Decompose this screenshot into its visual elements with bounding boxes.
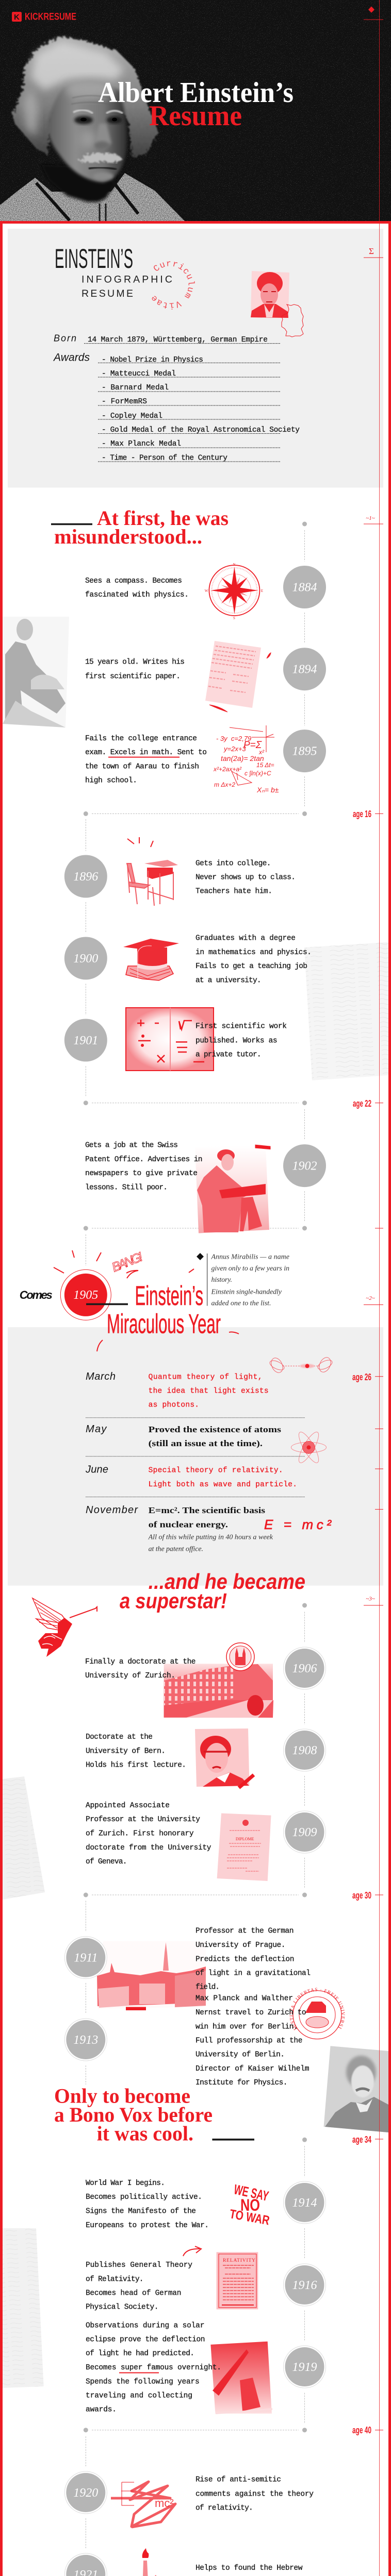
icon: math scribbles: Xₙ= b± <box>256 786 279 794</box>
note: annus mirabilis: history. <box>211 1276 232 1284</box>
row: June <box>85 1464 297 1489</box>
text: first work: a private tutor. <box>196 1051 262 1059</box>
text: doctorate Zurich: University of Zurich. <box>85 1672 175 1680</box>
year badge 1906: 1906 <box>292 1662 317 1675</box>
text: compass: fascinated with physics. <box>85 591 189 599</box>
icon: atoms in line <box>268 1355 334 1375</box>
heading: Only to become a Bono Vox: Only to become <box>54 2084 190 2108</box>
text: college: Teachers hate him. <box>196 888 272 896</box>
awards list: - Time - Person of the Century <box>102 454 227 463</box>
awards list: Awards <box>53 352 90 364</box>
text: solar eclipse: awards. <box>86 2406 117 2414</box>
year badge 1896: 1896 <box>73 870 98 884</box>
row: March: Quantum theory of light, <box>149 1374 263 1382</box>
text: Bern: University of Bern. <box>86 1748 166 1756</box>
heading: At first, he was misunderstood <box>51 506 229 548</box>
timeline entry: 1906 <box>85 1643 326 1718</box>
hero photo: Einstein portrait <box>0 36 185 221</box>
text: anti-semitic comments: Rise of anti-semitic <box>196 2476 281 2484</box>
icon: crossed-out formula <box>111 2482 175 2527</box>
row: May: May <box>86 1423 107 1435</box>
handwritten: E=mc2: E = mc² <box>264 1517 332 1532</box>
timeline entry: 1908 <box>86 1728 326 1788</box>
timeline entry: 1902 <box>85 1142 326 1233</box>
icon: open book with math symbols <box>126 1008 214 1071</box>
photo: Prague square <box>97 1941 206 2010</box>
text: professor Prague and Berlin: Full professorship at the <box>196 2037 302 2045</box>
note: annus mirabilis: given only to a few years in <box>211 1265 289 1273</box>
born row: Born <box>54 333 76 343</box>
heading: and he became a superstar <box>120 1569 305 1613</box>
row: May: (still an issue at the time). <box>149 1438 263 1448</box>
timeline entry: 1914 <box>86 2179 326 2230</box>
heading: Einstein's infographic resume: INFOGRAPHIC <box>82 274 172 285</box>
illustration: angel with trumpet <box>32 1598 97 1657</box>
icon: compass: W <box>205 589 208 593</box>
timeline entry: 1901 <box>64 1008 287 1071</box>
born row: 14 March 1879, Württemberg, German Empire <box>88 336 268 344</box>
year badge 1919: 1919 <box>292 2361 317 2374</box>
year badge 1911 <box>64 1937 107 1979</box>
year badge 1921 <box>64 2553 107 2576</box>
icon: math scribbles: x² <box>258 749 265 756</box>
awards list: - Barnard Medal <box>102 384 169 392</box>
text: graduation: Graduates with a degree <box>196 935 296 943</box>
year badge 1914 <box>284 2181 326 2224</box>
timeline entry: 1916 <box>86 2246 326 2312</box>
year badge 1901: 1901 <box>73 1034 98 1047</box>
timeline entry: 1896 <box>64 837 296 906</box>
text: general relativity <box>86 2261 192 2312</box>
text: professor Prague and Berlin: Professor at the German <box>196 1927 294 1936</box>
heading: Einstein's Miraculous Year <box>107 1281 221 1340</box>
text: anti-semitic comments <box>196 2476 314 2512</box>
text: associate professor: Appointed Associate <box>86 1802 170 1810</box>
icon: university seal <box>226 1643 254 1671</box>
icon: compass <box>205 563 263 620</box>
text: professor Prague and Berlin: of light in a gravitational <box>196 1970 311 1978</box>
ruler label: age 40: age 40 <box>352 2425 371 2435</box>
icon: compass: S <box>233 616 235 620</box>
text: Bern <box>86 1733 186 1769</box>
icon: compass: E <box>261 589 263 593</box>
age ruler <box>352 0 383 2576</box>
text: graduation: Fails to get a teaching job <box>196 962 307 971</box>
icon: we say no to war: NO <box>240 2196 260 2214</box>
note: annus mirabilis: Einstein single-handedly <box>210 1288 282 1296</box>
text: doctorate Zurich <box>85 1658 196 1680</box>
timeline entry: 1884 <box>85 563 326 620</box>
text: compass <box>85 577 189 599</box>
heading: Einstein's Miraculous Year: Miraculous Year <box>107 1309 221 1340</box>
photo: teenage Einstein, faded <box>3 617 69 727</box>
icon: Hebrew University logo <box>135 2548 167 2576</box>
panel: hero banner <box>0 0 391 221</box>
heading: Only to become a Bono Vox: a Bono Vox before <box>54 2103 213 2126</box>
text: WWI: Europeans to protest the War. <box>86 2222 209 2230</box>
text: associate professor: Professor at the University <box>86 1816 200 1824</box>
ruler marker: section 1: ~1~ <box>366 515 375 521</box>
text: college exam <box>85 735 207 785</box>
timeline connectors <box>84 521 307 2576</box>
year badge 1909: 1909 <box>292 1826 317 1839</box>
icon: math scribbles: P=Σ <box>243 740 262 751</box>
ruler marker: top diamond <box>368 6 374 13</box>
text: general relativity: Publishes General Theory <box>86 2261 192 2269</box>
title: Albert Einstein’s <box>98 77 294 109</box>
icon: Relativity book: RELATIVITY <box>223 2258 255 2263</box>
text: solar eclipse: of light he had predicted. <box>86 2350 194 2358</box>
year badge 1914: 1914 <box>292 2196 317 2210</box>
year badge 1920 <box>64 2471 107 2514</box>
row: June: Special theory of relativity. <box>149 1466 283 1475</box>
text: WWI: World War I begins. <box>86 2179 165 2188</box>
text: college <box>196 859 296 896</box>
timeline entry: 1920 <box>64 2471 314 2527</box>
timeline entry: 1894 <box>85 641 326 712</box>
heading: and he became a superstar: a superstar! <box>120 1589 227 1613</box>
note: annus mirabilis: added one to the list. <box>211 1300 271 1308</box>
ruler label: age 30: age 30 <box>352 1890 371 1901</box>
icon: math scribbles: y=2x+3 <box>223 745 246 753</box>
text: patent office: Gets a job at the Swiss <box>85 1142 178 1150</box>
icon: math scribbles: - 3y c=2,79 <box>216 735 251 742</box>
title <box>98 77 294 132</box>
text: general relativity: Physical Society. <box>86 2303 159 2312</box>
stamp: Freie Universitat Berlin: IUSTITIA LIBERTAS · FREIE UNIVERSITÄT BERLIN <box>290 1988 345 2031</box>
awards list: - Max Planck Medal <box>102 440 181 448</box>
row: May: Proved the existence of atoms <box>149 1425 281 1434</box>
text: WWI: Signs the Manifesto of the <box>86 2207 196 2215</box>
text: graduation <box>196 935 312 985</box>
row: June: Light both as wave and particle. <box>149 1481 297 1489</box>
icon: compass: N <box>233 563 236 567</box>
icon: crossed-out formula: mc² <box>155 2497 174 2510</box>
year badge 1906 <box>284 1647 326 1689</box>
heading: At first, he was misunderstood: At first, he was <box>97 506 229 530</box>
year badge 1902: 1902 <box>292 1160 317 1173</box>
text: patent office: Patent Office. Advertises in <box>85 1156 202 1164</box>
note: annus mirabilis <box>197 1253 289 1308</box>
text: professor Prague and Berlin: Director of Kaiser Wilhelm <box>196 2065 309 2073</box>
year badge 1895: 1895 <box>292 745 317 758</box>
icon: math scribbles: c ∫ln(x)+C <box>245 770 271 777</box>
text: graduation: in mathematics and physics. <box>196 948 312 957</box>
text: patent office: newspapers to give private <box>85 1170 198 1178</box>
text: solar eclipse: Spends the following years <box>86 2378 200 2386</box>
year badge 1909 <box>284 1811 326 1853</box>
text: solar eclipse: traveling and collecting <box>86 2392 192 2400</box>
heading: Einstein's infographic resume: EINSTEIN’S <box>55 244 133 274</box>
text: Hebrew University: Helps to found the Hebrew <box>196 2564 303 2572</box>
text: professor Prague and Berlin: Predicts the deflection <box>196 1955 294 1963</box>
text: professor Prague and Berlin: Max Planck and Walther <box>196 1995 293 2003</box>
stamp: Freie Universitat Berlin <box>290 1988 345 2039</box>
text: professor Prague and Berlin: Institute for Physics. <box>196 2079 287 2087</box>
year badge 1884 <box>283 566 326 608</box>
heading: Only to become a Bono Vox: it was cool. <box>97 2122 193 2145</box>
text: patent office <box>85 1142 202 1192</box>
icon: math scribbles: tan(2a)= 2tan <box>221 754 264 762</box>
logo: Kickresume: K <box>14 13 20 22</box>
panel: miraculous year months <box>85 1355 334 1553</box>
photo: diploma: DIPLOME <box>236 1837 254 1841</box>
heading: Only to become a Bono Vox <box>54 2084 254 2145</box>
text: Bern: Doctorate at the <box>86 1733 153 1741</box>
text: first paper: first scientific paper. <box>85 673 181 681</box>
photo: university of Zurich building <box>164 1664 273 1718</box>
text: professor Prague and Berlin <box>196 1927 311 2087</box>
photo: observatory telescope <box>210 2342 272 2414</box>
text: solar eclipse: Becomes super famous overnight. <box>86 2364 221 2372</box>
year badge 1911: 1911 <box>74 1952 97 1965</box>
row: November: at the patent office. <box>149 1545 203 1553</box>
text: professor Prague and Berlin: Nernst travel to Zurich to <box>196 2009 306 2017</box>
year badge 1902 <box>283 1144 326 1187</box>
icon: we say no to war: WE SAY <box>233 2182 270 2204</box>
ruler label: age 16: age 16 <box>353 809 371 819</box>
year badge 1884: 1884 <box>292 581 317 595</box>
icon: school desk <box>127 837 178 906</box>
awards list: - Gold Medal of the Royal Astronomical Society <box>102 426 300 434</box>
text: associate professor: of Zurich. First honorary <box>86 1830 194 1838</box>
ruler marker: section 3: ~3~ <box>366 1596 375 1602</box>
icon: we say no to war: TO WAR <box>229 2207 271 2228</box>
ruler label: age 22: age 22 <box>353 1098 371 1109</box>
text: first paper <box>85 658 185 681</box>
panel: miraculous year background <box>8 1327 383 1586</box>
text: patent office: lessons. Still poor. <box>85 1184 168 1192</box>
year badge 1894 <box>283 648 326 690</box>
timeline entry: 1900 <box>64 935 312 985</box>
photo: young Einstein <box>251 271 289 318</box>
text: professor Prague and Berlin: University of Berlin. <box>196 2051 285 2059</box>
awards list: - ForMemRS <box>102 398 147 406</box>
timeline entry: 1919 <box>86 2322 326 2414</box>
row: May <box>86 1423 281 1448</box>
photo: diploma <box>217 1814 271 1881</box>
year badge 1919 <box>284 2346 326 2388</box>
text: college exam: high school. <box>85 777 137 785</box>
year badge 1900 <box>64 937 107 980</box>
dividers <box>86 1418 305 1497</box>
text: college exam: Fails the college entrance <box>85 735 197 743</box>
text: associate professor <box>86 1802 211 1866</box>
heading: Einstein's infographic resume: RESUME <box>82 288 133 299</box>
row: November <box>86 1504 273 1553</box>
year badge 1905: 1905 <box>73 1289 98 1302</box>
year badge 1900: 1900 <box>73 952 98 965</box>
text: college: Never shows up to class. <box>196 874 296 882</box>
year badge 1894: 1894 <box>292 663 317 676</box>
text: compass: Sees a compass. Becomes <box>85 577 182 585</box>
year badge 1908: 1908 <box>292 1744 317 1757</box>
heading: Einstein's Miraculous Year: Einstein’s <box>135 1281 203 1311</box>
comes label: Comes <box>20 1289 53 1301</box>
row: November: All of this while putting in 40 hours a week <box>148 1534 273 1541</box>
text: first paper: 15 years old. Writes his <box>85 658 185 667</box>
icon: math scribbles <box>213 725 279 794</box>
ruler label: age 26: age 26 <box>352 1372 371 1382</box>
row: March: the idea that light exists <box>149 1387 269 1396</box>
text: doctorate Zurich: Finally a doctorate at the <box>85 1658 196 1666</box>
photo: Einstein at the patent office <box>195 1145 270 1233</box>
awards list: - Matteucci Medal <box>102 370 176 378</box>
awards list <box>53 352 300 463</box>
year badge 1913 <box>64 2019 107 2061</box>
text: solar eclipse: eclipse prove the deflection <box>86 2336 205 2344</box>
text: first work: First scientific work <box>196 1023 287 1031</box>
born row <box>54 333 281 344</box>
panel: profile card background <box>8 229 383 487</box>
timeline entry: 1909 <box>86 1802 326 1881</box>
section: 1905 miraculous year heading <box>20 1249 289 1351</box>
faded manuscript page, right <box>304 942 388 1080</box>
row: November: of nuclear energy. <box>149 1519 228 1529</box>
icon: math scribbles: m Δx+2 <box>214 781 235 788</box>
panel: profile card <box>53 244 304 463</box>
photo: Einstein portrait, red <box>195 1728 254 1788</box>
text: WWI: Becomes politically active. <box>86 2193 202 2201</box>
text: anti-semitic comments: comments against the theory <box>196 2490 314 2498</box>
arrow <box>183 2246 201 2256</box>
heading: At first, he was misunderstood: misunderstood... <box>54 525 202 548</box>
year badge 1916 <box>284 2264 326 2306</box>
row: November: E=mc². The scientific basis <box>149 1505 265 1515</box>
text: college exam: the town of Aarau to finish <box>85 762 199 771</box>
text: associate professor: of Geneva. <box>86 1858 127 1866</box>
row: November: November <box>86 1504 138 1516</box>
title: Resume <box>149 100 242 132</box>
text: professor Prague and Berlin: field. <box>196 1984 220 1992</box>
year badge 1895 <box>283 730 326 772</box>
faded manuscript page, lower left <box>3 2228 44 2388</box>
text: solar eclipse <box>86 2322 221 2414</box>
text: college exam: exam. Excels in math. Sent to <box>85 749 207 757</box>
year badge 1905 <box>60 1269 111 1320</box>
icon: atom flower <box>291 1430 326 1465</box>
year badge 1901 <box>64 1019 107 1061</box>
icon: paper <box>205 641 271 712</box>
text: WWI <box>86 2179 209 2230</box>
awards list: - Copley Medal <box>102 412 162 420</box>
timeline entry: 1921 <box>64 2548 303 2576</box>
text: general relativity: Becomes head of German <box>86 2290 181 2298</box>
icon: graduation cap and books <box>123 939 179 980</box>
awards list: - Nobel Prize in Physics <box>102 356 203 364</box>
bar <box>86 1303 128 1305</box>
row: March: March <box>86 1371 116 1382</box>
ruler marker: sigma: Σ <box>369 246 374 256</box>
text: Bern: Holds his first lecture. <box>86 1761 186 1769</box>
logo: Kickresume: KICKRESUME <box>25 11 76 23</box>
logo: Kickresume <box>12 11 76 23</box>
icon: we say no to war <box>229 2182 271 2228</box>
text: general relativity: of Relativity. <box>86 2275 143 2283</box>
accent strokes: burst <box>54 1250 239 1351</box>
row: June: June <box>85 1464 108 1475</box>
icon: math scribbles: x²+2ax+a² <box>213 766 242 773</box>
faded manuscript page, left <box>3 1776 45 1900</box>
year badge 1896 <box>64 855 107 897</box>
text: graduation: at a university. <box>196 977 262 985</box>
icon: Relativity book <box>217 2252 258 2309</box>
map: Germany <box>282 304 303 337</box>
text: college: Gets into college. <box>196 859 271 868</box>
text: associate professor: doctorate from the University <box>86 1844 211 1852</box>
stamp: Curriculum Vitae: Curriculum Vitae <box>152 261 195 310</box>
text: professor Prague and Berlin: University of Prague. <box>196 1941 286 1950</box>
year badge 1913: 1913 <box>73 2033 98 2047</box>
row: March <box>86 1371 269 1410</box>
text: solar eclipse: Observations during a solar <box>86 2322 204 2330</box>
timeline entry: 1895 <box>85 725 326 794</box>
icon: math scribbles: 15 Δt= <box>256 761 274 769</box>
year badge 1916: 1916 <box>292 2279 317 2292</box>
year badge 1920: 1920 <box>73 2486 98 2500</box>
text: anti-semitic comments: of relativity. <box>196 2504 253 2512</box>
text: first work <box>196 1023 287 1059</box>
ruler label: age 34: age 34 <box>352 2134 371 2145</box>
handwritten: BANG!: BANG! <box>110 1249 145 1275</box>
heading: and he became a superstar: ...and he became <box>149 1569 305 1594</box>
row: March: as photons. <box>149 1401 199 1410</box>
text: professor Prague and Berlin: win him over for Berlin. <box>196 2023 298 2031</box>
photo: Einstein with moustache, faded <box>324 2046 388 2132</box>
note: annus mirabilis: Annus Mirabilis — a name <box>210 1253 289 1261</box>
text: first work: published. Works as <box>196 1037 278 1045</box>
ruler marker: section 2: ~2~ <box>366 1295 375 1301</box>
year badge 1908 <box>284 1729 326 1771</box>
heading: Einstein's infographic resume <box>55 244 172 299</box>
